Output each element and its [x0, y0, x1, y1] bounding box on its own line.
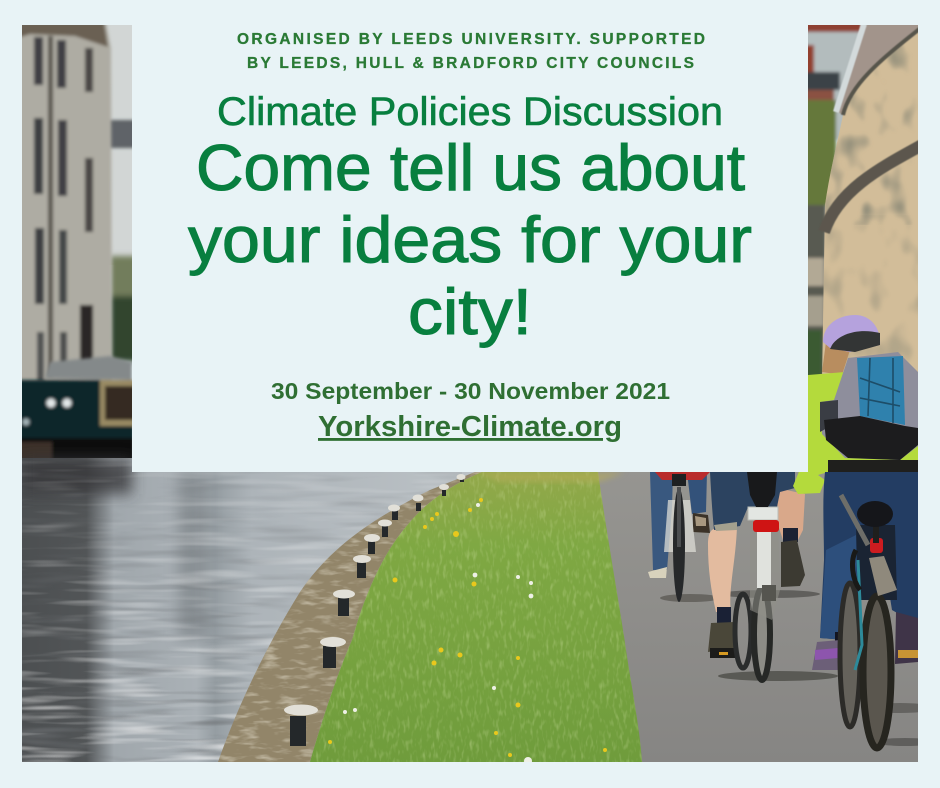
- main heading: your ideas for your: [188, 203, 752, 276]
- rider and bike: near, with helmet and rucksack: [793, 315, 918, 752]
- cycle helmet: [823, 315, 880, 352]
- trees behind building: [110, 252, 132, 366]
- organiser line: [237, 31, 705, 72]
- belt: [828, 460, 918, 473]
- rucksack: [820, 352, 918, 460]
- frame shadow between legs: [856, 525, 897, 600]
- organiser line: ORGANISED BY LEEDS UNIVERSITY. SUPPORTED: [237, 31, 705, 48]
- mooring bollards: [284, 474, 466, 746]
- grass verge: [305, 470, 645, 765]
- stone quay edge: [210, 470, 490, 765]
- bridge fragment: [108, 120, 138, 148]
- bike wheels: [840, 583, 860, 727]
- main heading: [188, 131, 752, 348]
- hi-vis jacket: [793, 372, 918, 494]
- rider and bike: far: [648, 472, 720, 602]
- blurred building: [18, 22, 112, 385]
- mudguard and rear light: [869, 556, 897, 596]
- text panel: [132, 0, 808, 472]
- jeans: [820, 472, 918, 640]
- wall coping band: [824, 145, 922, 232]
- canal water: [22, 458, 482, 762]
- organiser line: BY LEEDS, HULL & BRADFORD CITY COUNCILS: [247, 55, 694, 72]
- railing: [838, 22, 922, 115]
- dates: 30 September - 30 November 2021: [271, 378, 670, 404]
- saddle: [857, 501, 893, 527]
- stone canal wall: [820, 22, 922, 385]
- shoes: [812, 640, 840, 670]
- dandelions: [328, 498, 607, 757]
- sky behind building: [106, 25, 132, 258]
- rider and bike: middle: [708, 472, 838, 681]
- website link: Yorkshire-Climate.org: [318, 411, 622, 443]
- main heading: city!: [408, 275, 532, 348]
- upper-right background buildings: [808, 25, 862, 375]
- subtitle: Climate Policies Discussion: [217, 90, 723, 134]
- hair: [822, 344, 850, 374]
- main heading: Come tell us about: [196, 131, 745, 204]
- narrowboat: [22, 355, 132, 458]
- dandelion clocks: [343, 503, 533, 765]
- asphalt path: [598, 472, 918, 762]
